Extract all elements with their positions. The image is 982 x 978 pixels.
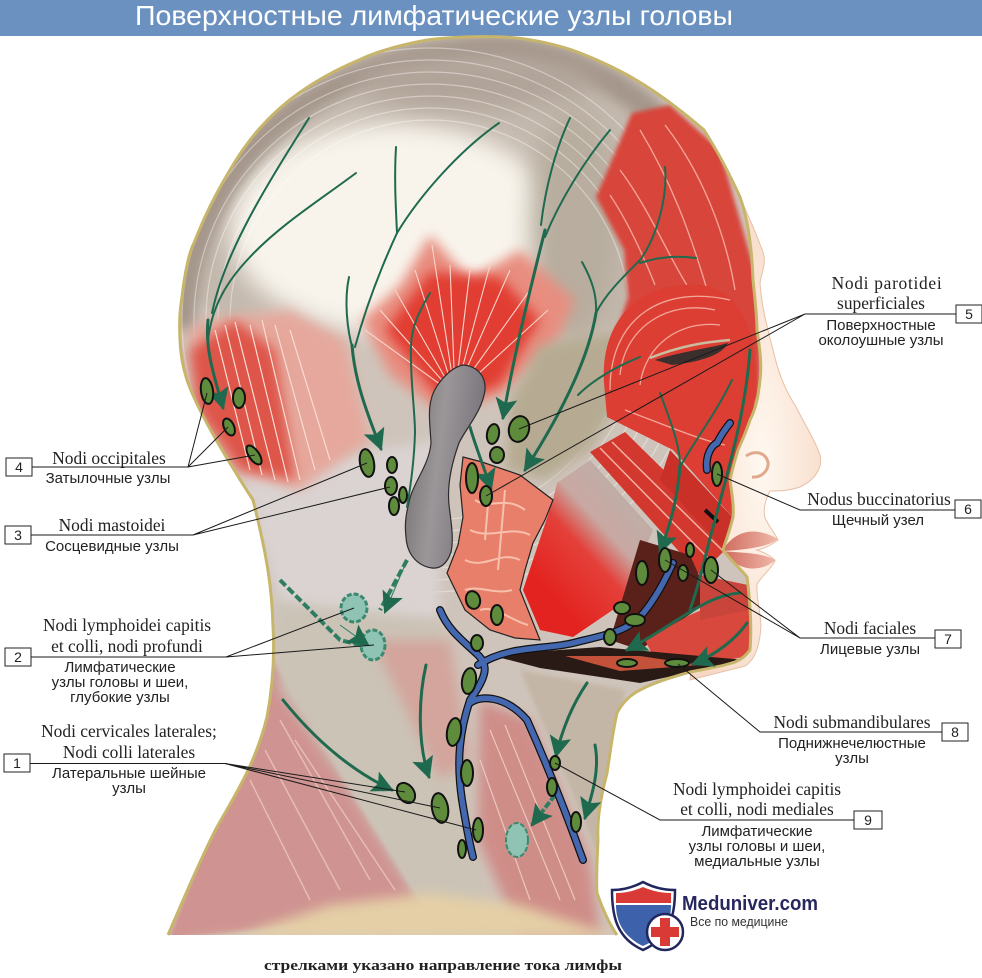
callout 1: lateral cervical nodes: Nodi cervicales laterales; (41, 721, 217, 741)
callout 5: superficial parotid nodes: Поверхностные (826, 317, 936, 334)
callout 7: facial nodes (665, 560, 961, 658)
parotid gland (447, 457, 553, 640)
frontal muscle (596, 105, 760, 400)
callout 2: deep nodes: et colli, nodi profundi (51, 636, 203, 656)
logo: Meduniver shield: Meduniver.com (682, 892, 818, 915)
callout 5: superficial parotid nodes: Nodi parotidei (832, 273, 942, 293)
zygomatic muscle straps (590, 432, 735, 575)
callout 8: submandibular nodes: Nodi submandibulares (774, 712, 931, 732)
trapezius (168, 660, 425, 940)
callout 4: occipital nodes (6, 393, 255, 487)
green lymph vessels with arrows (207, 118, 750, 818)
cut skin edge (168, 37, 761, 935)
callout 6: buccal node: Щечный узел (832, 512, 924, 529)
callout 7: facial nodes: Лицевые узлы (820, 641, 920, 658)
callout 7: facial nodes: 7 (944, 631, 952, 647)
callout 5: superficial parotid nodes (486, 273, 982, 496)
beige temporal fascia (505, 330, 625, 480)
callout 8: submandibular nodes: 8 (951, 724, 959, 740)
chin muscles (646, 602, 750, 659)
trapezius fibres (250, 720, 395, 900)
callout 2: deep nodes: глубокие узлы (70, 689, 170, 706)
callout 9: medial nodes: Nodi lymphoidei capitis (673, 779, 841, 799)
neck back fascia (243, 440, 442, 618)
orbicularis oculi (604, 285, 756, 520)
callout 6: buccal node: 6 (964, 501, 972, 517)
scalp galea (181, 38, 670, 592)
skin silhouette with nose and lips (690, 197, 821, 680)
title bar (0, 0, 982, 36)
callout 1: lateral cervical nodes: Латеральные шейные (52, 765, 206, 782)
callout 3: mastoid nodes: Сосцевидные узлы (45, 538, 179, 555)
callout 8: submandibular nodes: Поднижнечелюстные (778, 735, 926, 752)
callout 3: mastoid nodes: Nodi mastoidei (59, 515, 166, 535)
pink neck band (372, 640, 470, 780)
mid neck tissue (274, 599, 434, 896)
callout 6: buccal node: Nodus buccinatorius (807, 489, 951, 509)
callout 2: deep nodes (5, 608, 374, 706)
callout 4: occipital nodes: 4 (15, 459, 23, 475)
callout 3: mastoid nodes: 3 (14, 527, 22, 543)
sternocleidomastoid (478, 700, 600, 935)
callout 2: deep nodes: Лимфатические (64, 659, 176, 676)
deep facial region (614, 540, 700, 646)
callout 7: facial nodes: Nodi faciales (824, 618, 916, 638)
lower lip region muscle (700, 575, 748, 620)
callout 1: lateral cervical nodes: узлы (112, 780, 146, 797)
callout 2: deep nodes: 2 (14, 649, 22, 665)
occipital muscle (188, 310, 370, 490)
masseter muscle (523, 460, 653, 637)
blue veins (440, 423, 730, 860)
dissected head and neck painting (158, 30, 780, 940)
callout 9: medial nodes: et colli, nodi mediales (680, 799, 834, 819)
callout 5: superficial parotid nodes: superficiales (837, 293, 925, 313)
callout 6: buccal node (717, 474, 981, 529)
callout 1: lateral cervical nodes (4, 721, 476, 830)
ear (405, 365, 485, 568)
callout 9: medial nodes: медиальные узлы (694, 853, 820, 870)
callout 2: deep nodes: Nodi lymphoidei capitis (43, 615, 211, 635)
callout 5: superficial parotid nodes: околоушные узлы (818, 332, 944, 349)
callout 9: medial nodes: Лимфатические (701, 823, 813, 840)
title bar: Поверхностные лимфатические узлы головы (135, 0, 733, 31)
submandibular tissue (520, 670, 625, 860)
logo: Meduniver shield: Все по медицине (690, 914, 788, 929)
chest base (236, 890, 602, 935)
callout 5: superficial parotid nodes: 5 (965, 306, 973, 322)
lymph nodes (199, 377, 722, 858)
callout 1: lateral cervical nodes: 1 (13, 755, 21, 771)
callout 8: submandibular nodes (678, 664, 968, 767)
callout 2: deep nodes: узлы головы и шеи, (52, 674, 188, 691)
callout 4: occipital nodes: Nodi occipitales (52, 448, 166, 468)
temporalis muscle fan (362, 235, 575, 412)
base tissue (160, 30, 780, 940)
deep dashed lymph vessels (280, 560, 555, 857)
callout 1: lateral cervical nodes: Nodi colli laterales (63, 742, 195, 762)
logo: Meduniver shield (612, 882, 818, 950)
callout 9: medial nodes: 9 (864, 812, 872, 828)
callout 8: submandibular nodes: узлы (835, 750, 869, 767)
caption: стрелками указано направление тока лимфы (264, 958, 622, 974)
callout 3: mastoid nodes (5, 463, 390, 555)
callout 4: occipital nodes: Затылочные узлы (46, 470, 170, 487)
callout 9: medial nodes: узлы головы и шеи, (689, 838, 825, 855)
submandibular band (490, 647, 745, 683)
callout 9: medial nodes (555, 763, 882, 870)
